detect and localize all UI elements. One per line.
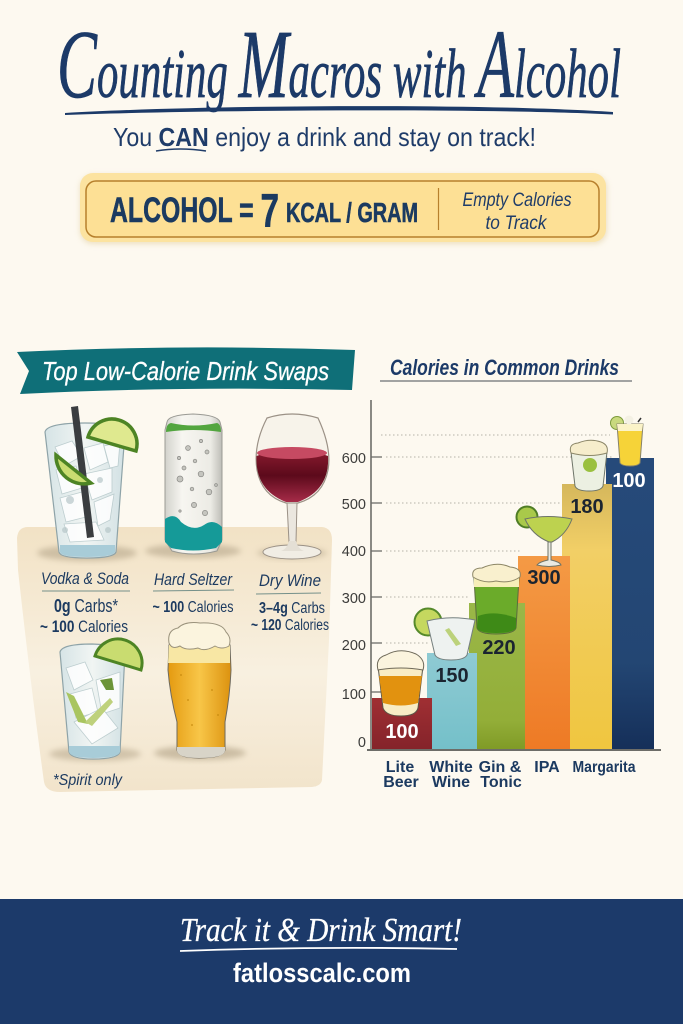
bar values: 220 (482, 637, 516, 659)
icon: vodka and soda glass (37, 406, 137, 561)
footer website: fatlosscalc.com (233, 958, 411, 988)
label: dry wine (251, 571, 329, 634)
bar category labels (383, 759, 636, 791)
callout headline: ALCOHOL = (110, 191, 313, 230)
callout headline: 7 (261, 184, 279, 237)
icon: white wine tumbler with lime (414, 608, 475, 660)
section ribbon heading (17, 347, 355, 394)
y axis: 300 (342, 591, 366, 607)
footer band (0, 899, 683, 1024)
title: Counting Macros with Alcohol (57, 11, 621, 119)
label: vodka and soda: ~ 100 Calories (40, 617, 128, 636)
icon: margarita tumbler (570, 440, 607, 491)
bar values (385, 470, 646, 743)
callout side note: to Track (486, 213, 548, 234)
bar category labels: Wine (432, 774, 470, 791)
icon: hard seltzer can (145, 414, 241, 558)
subtitle: You CAN enjoy a drink and stay on track! (113, 122, 536, 152)
label: hard seltzer: ~ 100 Calories (152, 599, 234, 616)
beige backdrop (17, 527, 332, 792)
footer slogan: Track it & Drink Smart! (180, 912, 462, 949)
bar: spirit 100 (606, 458, 654, 750)
bar values: 100 (385, 721, 419, 743)
icon: yellow cocktail (610, 416, 643, 466)
icon: second vodka soda glass with lime (49, 639, 142, 761)
section ribbon heading: Top Low-Calorie Drink Swaps (42, 356, 329, 386)
bar: white wine 150 (427, 653, 477, 750)
icon: red wine glass (256, 414, 329, 559)
bar category labels: Gin & (479, 759, 522, 776)
label: vodka and soda (40, 569, 130, 636)
y axis: 200 (342, 638, 366, 654)
bar: IPA 300 (518, 556, 570, 750)
icon: lite beer glass (377, 651, 424, 716)
bar: gin and tonic 220 (469, 603, 525, 750)
bar values: 150 (435, 665, 469, 687)
bar category labels: Margarita (572, 759, 636, 776)
icon: margarita glass with lime (516, 506, 572, 566)
y axis: 600 (342, 451, 366, 467)
bar values: 300 (527, 567, 561, 589)
callout side note: Empty Calories (462, 190, 572, 211)
bar values: 100 (612, 470, 646, 492)
bar: margarita 180 (562, 484, 612, 750)
x axis (367, 749, 661, 751)
panel: calories bar chart (342, 355, 661, 791)
chart heading: Calories in Common Drinks (390, 355, 619, 380)
label: vodka and soda: 0g Carbs* (54, 596, 118, 616)
callout: alcohol kcal per gram (80, 173, 607, 244)
footnote: spirit only: *Spirit only (53, 772, 123, 789)
y axis: 500 (342, 497, 366, 513)
y axis: 0 (358, 735, 366, 751)
bar category labels: Beer (383, 774, 419, 791)
y axis: 400 (342, 544, 366, 560)
bar category labels: White (429, 759, 473, 776)
icon: gin and tonic green glass (473, 564, 520, 634)
bar: lite beer 100 (372, 698, 432, 750)
bar category labels: Lite (386, 759, 414, 776)
label: dry wine: 3–4g Carbs (259, 600, 325, 617)
callout headline: KCAL / GRAM (286, 197, 418, 228)
panel: top low-calorie drink swaps (17, 347, 355, 792)
bar values: 180 (570, 496, 604, 518)
bar category labels: Tonic (480, 774, 522, 791)
label: dry wine: ~ 120 Calories (251, 617, 329, 634)
label: hard seltzer: Hard Seltzer (154, 570, 233, 589)
bar category labels: IPA (534, 759, 560, 776)
label: hard seltzer (152, 570, 234, 616)
label: dry wine: Dry Wine (259, 571, 321, 590)
label: vodka and soda: Vodka & Soda (41, 569, 129, 588)
icon: pint of beer (154, 623, 246, 760)
y axis: 100 (342, 687, 366, 703)
callout side note (462, 190, 572, 234)
y axis (342, 400, 382, 751)
